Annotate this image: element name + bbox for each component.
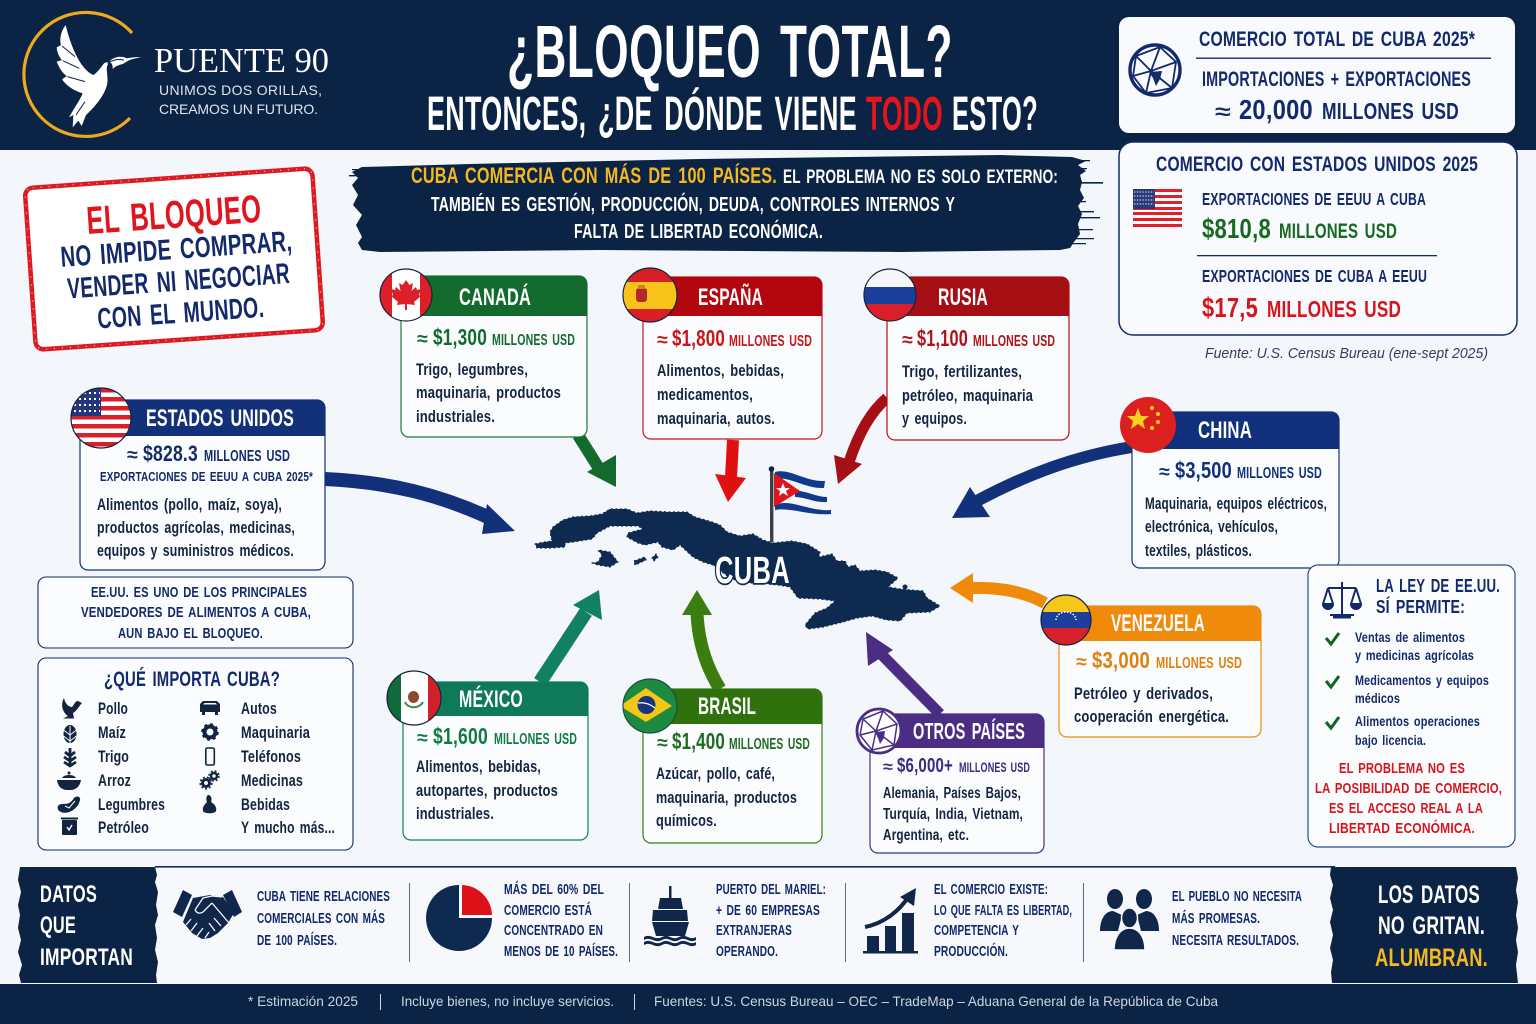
imports list left: Legumbres <box>98 795 165 814</box>
Brasil value: ≈ <box>657 733 668 754</box>
Estados Unidos value: $828.3 <box>143 441 198 466</box>
China goods: Maquinaria, equipos eléctricos, <box>1145 494 1327 513</box>
footer: sources <box>0 984 1536 1024</box>
icon: Venezuela flag <box>1041 595 1091 645</box>
exports from US: $810,8 <box>1202 213 1271 244</box>
imports list right: Bebidas <box>241 795 290 814</box>
icon: car <box>200 701 220 715</box>
icon: Brazil flag <box>620 679 677 733</box>
panel: comercio con Estados Unidos <box>1119 142 1517 335</box>
Brasil header band <box>660 689 822 724</box>
source note: Fuente: U.S. Census Bureau (ene-sept 2025) <box>1205 346 1488 362</box>
callout: principales vendedores: AUN BAJO EL BLOQUEO. <box>118 625 263 642</box>
icon: chicken <box>62 698 82 718</box>
otros países value: ≈ <box>883 759 893 776</box>
panel: datos que importan strip <box>18 866 1518 984</box>
China goods <box>1145 494 1327 560</box>
logo name: PUENTE 90 <box>154 41 329 80</box>
icon: scales <box>1323 582 1361 618</box>
panel: comercio total de Cuba <box>1119 17 1515 133</box>
otros países list: Turquía, India, Vietnam, <box>883 806 1023 823</box>
Brasil value: $1,400 <box>672 728 725 754</box>
icon: Mexico flag <box>387 671 441 725</box>
otros países value: $6,000+ <box>897 755 953 777</box>
México name: MÉXICO <box>459 685 523 713</box>
Canadá goods: industriales. <box>416 407 495 426</box>
label: los datos no gritan: NO GRITAN. <box>1378 912 1485 940</box>
México goods: industriales. <box>416 804 494 823</box>
fact: el pueblo <box>1172 889 1302 949</box>
Canadá name: CANADÁ <box>459 283 531 311</box>
España goods <box>657 361 784 428</box>
title: TODO <box>866 88 943 141</box>
Brasil goods: químicos. <box>656 811 717 830</box>
total value: 20,000 <box>1239 94 1313 125</box>
Rusia goods: petróleo, maquinaria <box>902 386 1033 405</box>
icon: US flag <box>1133 189 1182 227</box>
México goods <box>416 757 558 823</box>
icon: pie chart <box>426 885 492 951</box>
arrow: otros países to Cuba <box>866 632 940 714</box>
total value: MILLONES USD <box>1322 98 1459 124</box>
label: los datos no gritan: ALUMBRAN. <box>1375 944 1488 972</box>
law heading: SÍ PERMITE: <box>1376 596 1465 617</box>
logo: Puente 90 <box>24 12 329 136</box>
icon: people <box>1100 889 1159 950</box>
footer: sources: Incluye bienes, no incluye servicios. <box>401 993 614 1009</box>
Estados Unidos name: ESTADOS UNIDOS <box>146 405 294 432</box>
España value <box>657 325 812 351</box>
icon: globe <box>1130 45 1180 95</box>
icon: gold ring <box>24 12 132 136</box>
Canadá value: MILLONES USD <box>492 332 575 349</box>
logo tagline: CREAMOS UN FUTURO. <box>159 101 318 117</box>
China goods: electrónica, vehículos, <box>1145 517 1278 536</box>
fact: Mariel <box>716 882 826 960</box>
law conclusion: ES EL ACCESO REAL A LA <box>1329 800 1483 817</box>
allowed list: bajo licencia. <box>1355 733 1426 748</box>
fact: libertad: EL COMERCIO EXISTE: <box>934 882 1048 898</box>
card: otros países <box>857 709 1044 853</box>
panel: qué importa Cuba <box>38 658 353 850</box>
callout: principales vendedores: VENDEDORES DE ALIMENTOS A CUBA, <box>81 604 311 621</box>
otros países value: MILLONES USD <box>959 760 1030 775</box>
otros países list <box>883 785 1023 844</box>
Rusia goods: Trigo, fertilizantes, <box>902 362 1022 381</box>
stamp: el bloqueo: NO IMPIDE COMPRAR, <box>60 226 293 274</box>
Estados Unidos header band <box>100 400 325 436</box>
México header band <box>420 682 588 716</box>
label: datos que importan: IMPORTAN <box>40 944 133 971</box>
Canadá goods: maquinaria, productos <box>416 383 561 402</box>
España name: ESPAÑA <box>698 283 763 311</box>
label: datos que importan: DATOS <box>40 881 97 908</box>
Rusia value: ≈ <box>902 330 913 351</box>
card: China <box>1120 397 1339 568</box>
fact: relaciones comerciales: CUBA TIENE RELACIONES <box>257 889 390 905</box>
Rusia value: $1,100 <box>917 325 968 351</box>
label: los datos no gritan <box>1330 867 1518 983</box>
Canadá goods: Trigo, legumbres, <box>416 360 528 379</box>
Brasil goods: maquinaria, productos <box>656 788 797 807</box>
map: Cuba <box>535 466 940 629</box>
México goods: Alimentos, bebidas, <box>416 757 541 776</box>
Brasil value <box>657 728 810 754</box>
card: Venezuela <box>1041 595 1261 737</box>
card: Rusia <box>864 269 1069 440</box>
Venezuela value: ≈ <box>1076 652 1087 673</box>
fact: Mariel: EXTRANJERAS <box>716 923 792 939</box>
Venezuela value <box>1076 647 1242 673</box>
Rusia header band <box>900 277 1069 316</box>
icon: ship <box>644 886 696 946</box>
Rusia value: MILLONES USD <box>973 333 1055 350</box>
allowed list: y medicinas agrícolas <box>1355 648 1474 663</box>
banner: cuba comercia: TAMBIÉN ES GESTIÓN, PRODUCCIÓN, DEUDA, CONTROLES INTERNOS Y <box>431 192 955 216</box>
Venezuela goods: cooperación energética. <box>1074 707 1229 726</box>
México value: $1,600 <box>433 723 488 749</box>
imports list right: Y mucho más... <box>241 818 335 837</box>
Venezuela value: $3,000 <box>1092 647 1150 673</box>
icon: Spain flag <box>623 268 677 322</box>
España goods: medicamentos, <box>657 385 753 404</box>
China goods: textiles, plásticos. <box>1145 541 1252 560</box>
exports from US: MILLONES USD <box>1279 220 1397 243</box>
fact: libertad: COMPETENCIA Y <box>934 923 1019 939</box>
allowed list: Alimentos operaciones <box>1355 714 1480 729</box>
card: Canadá <box>380 268 587 437</box>
Rusia goods: y equipos. <box>902 409 967 428</box>
icon: white hummingbird <box>57 25 142 127</box>
title <box>427 10 1038 141</box>
fact: libertad <box>934 882 1072 960</box>
imports list right: Autos <box>241 699 277 718</box>
Canadá goods <box>416 360 561 426</box>
China value: MILLONES USD <box>1237 465 1322 482</box>
fact: relaciones comerciales: COMERCIALES CON MÁS <box>257 910 385 927</box>
fact: el pueblo: MÁS PROMESAS. <box>1172 910 1260 927</box>
otros países list: Alemania, Países Bajos, <box>883 785 1021 802</box>
imports list left: Pollo <box>98 699 128 718</box>
Brasil goods: Azúcar, pollo, café, <box>656 764 775 783</box>
fact: concentración <box>504 881 618 960</box>
imports list right: Maquinaria <box>241 723 310 742</box>
icon: China flag <box>1120 397 1176 453</box>
Brasil goods <box>656 764 797 830</box>
card: España <box>623 268 822 439</box>
exports from Cuba <box>1202 266 1427 323</box>
España header band <box>660 277 822 316</box>
otros países value <box>883 755 1030 777</box>
banner: cuba comercia: FALTA DE LIBERTAD ECONÓMICA. <box>574 219 823 243</box>
fact: el pueblo: EL PUEBLO NO NECESITA <box>1172 889 1302 905</box>
title: ¿BLOQUEO TOTAL? <box>507 10 953 93</box>
otros países name: OTROS PAÍSES <box>913 717 1025 744</box>
title: ENTONCES, ¿DE DÓNDE VIENE <box>427 86 857 141</box>
Venezuela header band <box>1080 606 1261 641</box>
Rusia goods <box>902 362 1033 428</box>
Venezuela goods <box>1074 684 1229 726</box>
imports list left: Arroz <box>98 771 131 790</box>
exports from US: EXPORTACIONES DE EEUU A CUBA <box>1202 189 1426 209</box>
logo tagline <box>159 82 322 117</box>
fact: el pueblo: NECESITA RESULTADOS. <box>1172 933 1299 949</box>
exports from Cuba: EXPORTACIONES DE CUBA A EEUU <box>1202 266 1427 286</box>
arrow: Venezuela to Cuba <box>950 573 1045 603</box>
icon: Cuban flag on pole <box>769 466 831 542</box>
España value: MILLONES USD <box>729 333 812 350</box>
España goods: Alimentos, bebidas, <box>657 361 784 380</box>
arrow: Rusia to Cuba <box>834 398 887 484</box>
México value <box>417 723 577 749</box>
stamp: el bloqueo: VENDER NI NEGOCIAR <box>66 258 291 305</box>
panel: la ley de EE.UU. <box>1308 565 1515 847</box>
card: Brasil <box>620 679 822 843</box>
icon: check marks <box>1326 633 1339 728</box>
banner: cuba comercia: CUBA COMERCIA CON MÁS DE 100 PAÍSES. <box>411 163 777 188</box>
imports list left: Maíz <box>98 723 126 742</box>
Venezuela goods: Petróleo y derivados, <box>1074 684 1213 703</box>
México value: MILLONES USD <box>494 731 577 748</box>
Estados Unidos goods: productos agrícolas, medicinas, <box>97 518 295 537</box>
Rusia value <box>902 325 1055 351</box>
Canadá header band <box>420 276 587 316</box>
law conclusion: EL PROBLEMA NO ES <box>1339 760 1465 777</box>
México value: ≈ <box>417 728 428 749</box>
allowed list: Ventas de alimentos <box>1355 630 1465 645</box>
icon: oil box <box>61 818 78 835</box>
Canadá value <box>417 324 575 350</box>
icon: medicine gears <box>200 771 219 789</box>
stamp: el bloqueo <box>25 168 323 350</box>
imports list right <box>241 699 335 837</box>
imports list left: Petróleo <box>98 818 149 837</box>
fact: relaciones comerciales <box>257 889 390 949</box>
Venezuela name: VENEZUELA <box>1111 610 1205 637</box>
icon: drink bottle <box>203 795 216 813</box>
allowed list: médicos <box>1355 691 1400 706</box>
exports from Cuba: MILLONES USD <box>1267 296 1401 322</box>
otros países header band <box>885 714 1044 748</box>
Rusia name: RUSIA <box>938 284 988 311</box>
label: datos que importan: QUE <box>40 912 76 939</box>
Estados Unidos value: MILLONES USD <box>204 448 290 465</box>
Estados Unidos value <box>100 441 314 484</box>
fact: Mariel: OPERANDO. <box>716 944 778 960</box>
icon: corn <box>64 725 76 744</box>
card: Estados Unidos <box>71 388 325 570</box>
Canadá value: ≈ <box>417 329 428 350</box>
icon: phone <box>206 748 214 765</box>
Brasil value: MILLONES USD <box>729 736 810 753</box>
icon: globe circle <box>857 709 901 753</box>
fact: concentración: COMERCIO ESTÁ <box>504 902 592 919</box>
Estados Unidos value: ≈ <box>127 445 138 466</box>
fact: concentración: MÁS DEL 60% DEL <box>504 881 604 898</box>
España value: ≈ <box>657 330 668 351</box>
footer: sources: Fuentes: U.S. Census Bureau – OEC – TradeMap – Aduana General de la República de Cuba <box>654 993 1218 1009</box>
icon: gear <box>202 724 218 740</box>
China value: $3,500 <box>1175 457 1232 483</box>
arrow: China to Cuba <box>952 447 1132 518</box>
Estados Unidos goods: equipos y suministros médicos. <box>97 541 294 560</box>
fact: concentración: MENOS DE 10 PAÍSES. <box>504 943 618 960</box>
fact: concentración: CONCENTRADO EN <box>504 923 603 939</box>
stamp: el bloqueo: EL BLOQUEO <box>85 188 263 243</box>
banner: cuba comercia: EL PROBLEMA NO ES SOLO EXTERNO: <box>783 166 1058 188</box>
otros países list: Argentina, etc. <box>883 827 969 844</box>
arrow: España to Cuba <box>715 440 746 502</box>
logo tagline: UNIMOS DOS ORILLAS, <box>159 82 322 98</box>
label: datos que importan <box>18 867 158 983</box>
Estados Unidos goods <box>97 495 295 560</box>
total value <box>1215 94 1459 125</box>
exports from Cuba: $17,5 <box>1202 292 1258 323</box>
icon: US flag circle <box>71 388 131 448</box>
icon: handshake <box>173 890 242 939</box>
España value: $1,800 <box>672 325 725 351</box>
imports list right: Medicinas <box>241 771 303 790</box>
icon: rice bowl <box>57 772 81 790</box>
stamp: el bloqueo: CON EL MUNDO. <box>96 292 265 335</box>
España goods: maquinaria, autos. <box>657 409 775 428</box>
fact: libertad: PRODUCCIÓN. <box>934 942 1008 960</box>
Brasil name: BRASIL <box>698 693 756 720</box>
icon: Russia flag <box>864 269 916 322</box>
fact: relaciones comerciales: DE 100 PAÍSES. <box>257 932 337 949</box>
callout: principales vendedores <box>38 577 353 648</box>
allowed list <box>1355 630 1489 748</box>
callout: principales vendedores: EE.UU. ES UNO DE LOS PRINCIPALES <box>91 584 307 601</box>
Cuba label: CUBA <box>715 550 790 592</box>
imports list left <box>98 699 165 837</box>
total value: ≈ <box>1215 99 1231 124</box>
law conclusion: LIBERTAD ECONÓMICA. <box>1329 819 1475 837</box>
icon: wheat <box>64 748 76 767</box>
Canadá value: $1,300 <box>433 324 487 350</box>
footer: sources: * Estimación 2025 <box>248 993 358 1009</box>
imports heading: ¿QUÉ IMPORTA CUBA? <box>104 668 280 691</box>
Venezuela value: MILLONES USD <box>1156 655 1242 672</box>
fact: libertad: LO QUE FALTA ES LIBERTAD, <box>934 903 1072 919</box>
banner: cuba comercia <box>349 155 1103 252</box>
law conclusion <box>1315 760 1502 837</box>
arrow: Brasil to Cuba <box>682 590 720 689</box>
header band <box>0 0 1536 150</box>
imports list left: Trigo <box>98 747 129 766</box>
fact: Mariel: PUERTO DEL MARIEL: <box>716 882 826 898</box>
fact: Mariel: + DE 60 EMPRESAS <box>716 903 820 919</box>
arrow: Canadá to Cuba <box>578 435 616 487</box>
allowed list: Medicamentos y equipos <box>1355 673 1489 688</box>
arrow: Estados Unidos to Cuba <box>325 479 515 534</box>
card: México <box>387 671 588 840</box>
icon: Canada flag <box>380 268 432 322</box>
icon: growth chart <box>863 888 918 954</box>
México goods: autopartes, productos <box>416 781 558 800</box>
title: ESTO? <box>952 88 1038 141</box>
China value: ≈ <box>1159 462 1170 483</box>
China name: CHINA <box>1198 417 1252 444</box>
China header band <box>1150 412 1339 449</box>
China value <box>1159 457 1322 483</box>
Estados Unidos goods: Alimentos (pollo, maíz, soya), <box>97 495 282 514</box>
label: los datos no gritan: LOS DATOS <box>1378 881 1480 909</box>
icon: legumes <box>58 797 80 813</box>
arrow: México to Cuba <box>540 590 602 682</box>
exports from US <box>1202 189 1426 244</box>
law heading <box>1376 576 1500 617</box>
Estados Unidos value: EXPORTACIONES DE EEUU A CUBA 2025* <box>100 469 314 484</box>
imports list right: Teléfonos <box>241 747 301 766</box>
